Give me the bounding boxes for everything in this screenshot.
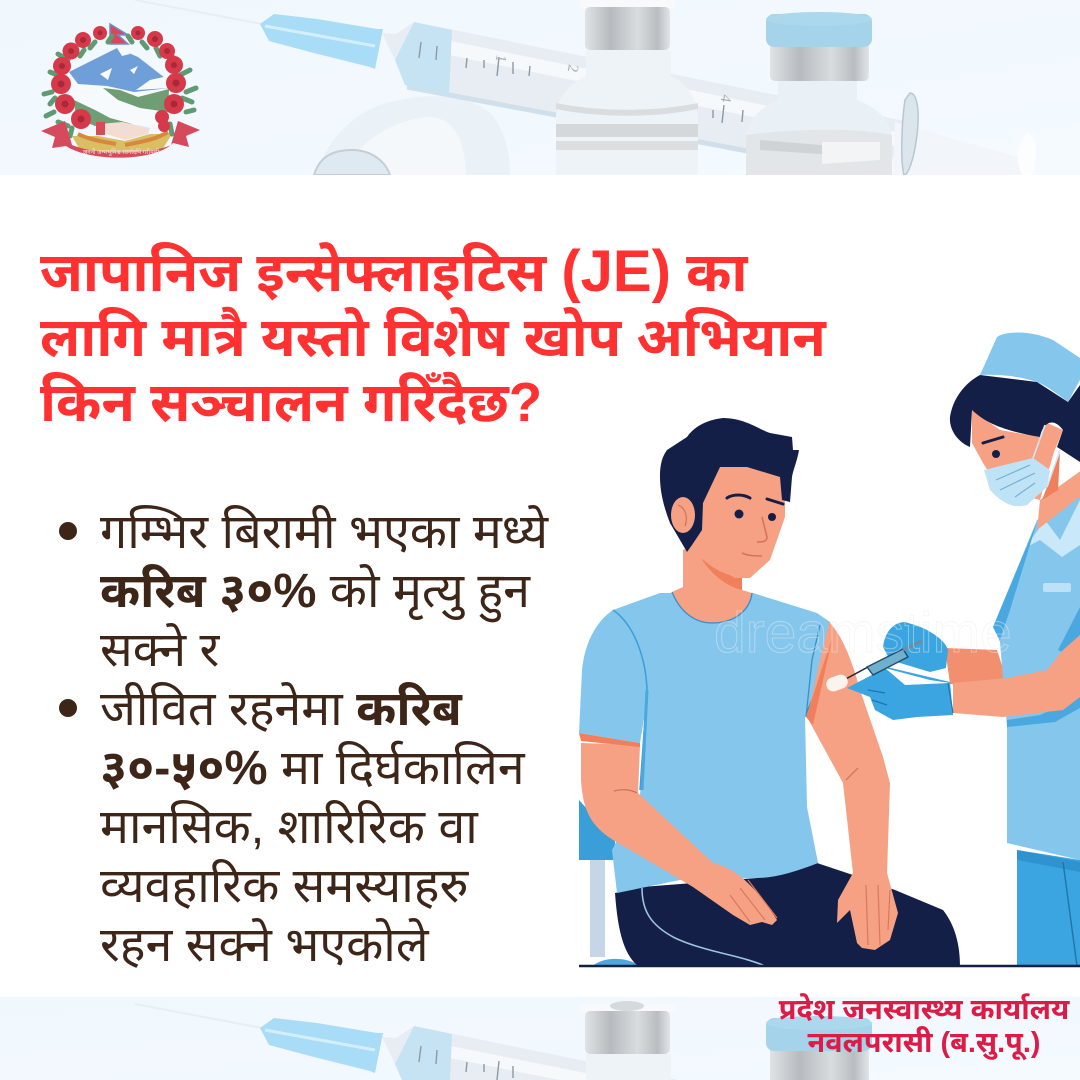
- floor line: [579, 965, 1080, 967]
- title: लागि मात्रै यस्तो विशेष खोप अभियान: [40, 307, 826, 368]
- bullet list text: [100, 505, 549, 972]
- nurse uniform: [993, 490, 1080, 860]
- title: जापानिज इन्सेफ्लाइटिस (JE) का: [40, 239, 747, 304]
- man trousers: [615, 863, 960, 966]
- illustration: nurse vaccinating a seated man: [579, 332, 1080, 968]
- bottom band: repeated vaccine photo: [0, 997, 1080, 1080]
- green hills: [74, 88, 169, 126]
- top band: vaccine vials and syringe photo: [0, 0, 1080, 175]
- footer: issuing office: [778, 993, 1070, 1060]
- footer: issuing office: नवलपरासी (ब.सु.पू.): [808, 1027, 1040, 1059]
- emblem of Nepal: [41, 22, 200, 158]
- title: [40, 239, 827, 433]
- bullet marker 2: [59, 699, 77, 717]
- nurse head: [950, 332, 1080, 530]
- watermark: dreamstime: dreamstime: [714, 601, 1012, 665]
- top band: vaccine vials and syringe photo: 4: [717, 93, 734, 104]
- red ribbon with motto: जननी जन्मभूमिश्च स्वर्गादपि गरीयसी: [83, 148, 160, 157]
- handshake: [96, 122, 150, 140]
- bullet list text: ३०-५०% मा दिर्घकालिन: [100, 741, 525, 795]
- sky: [70, 67, 172, 125]
- red ribbon with motto: [41, 121, 200, 158]
- nurse arms: [945, 648, 1010, 690]
- man left arm and hand: [579, 733, 777, 925]
- bullet list text: व्यवहारिक समस्याहरु: [100, 859, 468, 913]
- top band: vaccine vials and syringe photo: 2: [564, 63, 581, 73]
- bullet list text: जीवित रहनेमा करिब: [100, 682, 462, 736]
- syringe and gloved hands: [824, 622, 953, 720]
- bullet list text: करिब ३०% को मृत्यु हुन: [100, 564, 530, 618]
- bullet marker 1: [59, 522, 77, 540]
- footer: issuing office: प्रदेश जनस्वास्थ्य कार्यालय: [779, 994, 1069, 1026]
- top band: vaccine vials and syringe photo: 1: [492, 53, 509, 63]
- title: किन सञ्चालन गरिँदैछ?: [40, 372, 542, 433]
- nurse trousers: [1017, 850, 1080, 966]
- bullet list text: मानसिक, शारिरिक वा: [100, 800, 478, 854]
- chair: [579, 800, 640, 966]
- nurse forearm: [953, 635, 1080, 717]
- man shirt: [579, 593, 838, 893]
- bullet list text: गम्भिर बिरामी भएका मध्ये: [100, 505, 548, 559]
- bullet list text: रहन सक्ने भएकोले: [100, 918, 429, 972]
- wreath of rhododendrons: [44, 26, 196, 136]
- man right arm and hand: [806, 622, 898, 950]
- flag: [110, 24, 128, 44]
- bullet list text: सक्ने र: [100, 623, 219, 677]
- earth and laurels: [72, 132, 172, 154]
- man neck and head: [660, 418, 799, 623]
- mountain: [69, 48, 170, 92]
